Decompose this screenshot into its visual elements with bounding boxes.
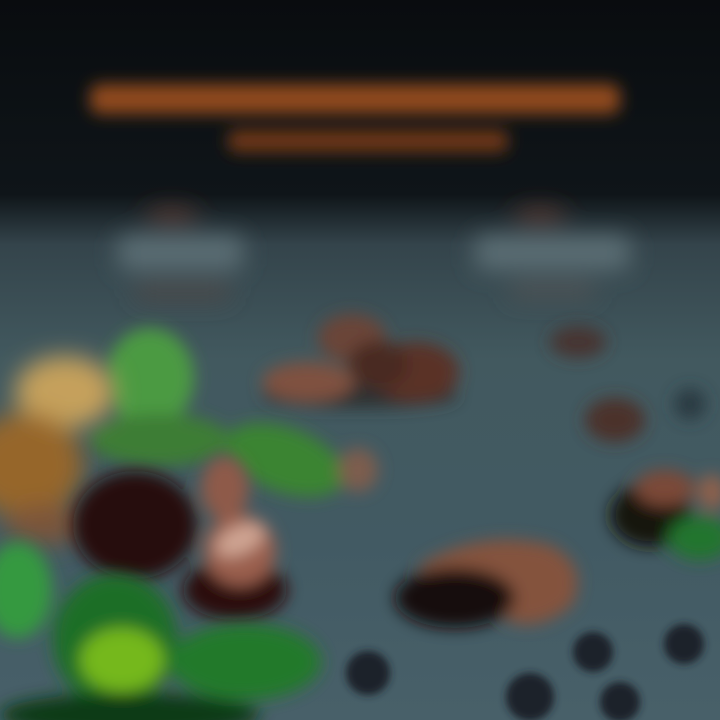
left text panel: blurred pale block (118, 208, 243, 300)
right text panel: blurred pale block (475, 208, 630, 298)
center chocolate pile (262, 314, 459, 408)
right edge chocolate with mint leaf (610, 470, 720, 560)
bottom center chocolate piece (395, 540, 578, 628)
mint leaves behind (90, 328, 378, 511)
nut pieces (0, 356, 115, 545)
blueberries (346, 624, 704, 720)
left foreground food cluster (0, 328, 378, 720)
dark chocolate chunks (73, 456, 287, 620)
right small chocolate pieces (550, 326, 706, 442)
title: illegible blurred orange heading (90, 84, 620, 152)
mint leaves foreground (0, 542, 321, 720)
